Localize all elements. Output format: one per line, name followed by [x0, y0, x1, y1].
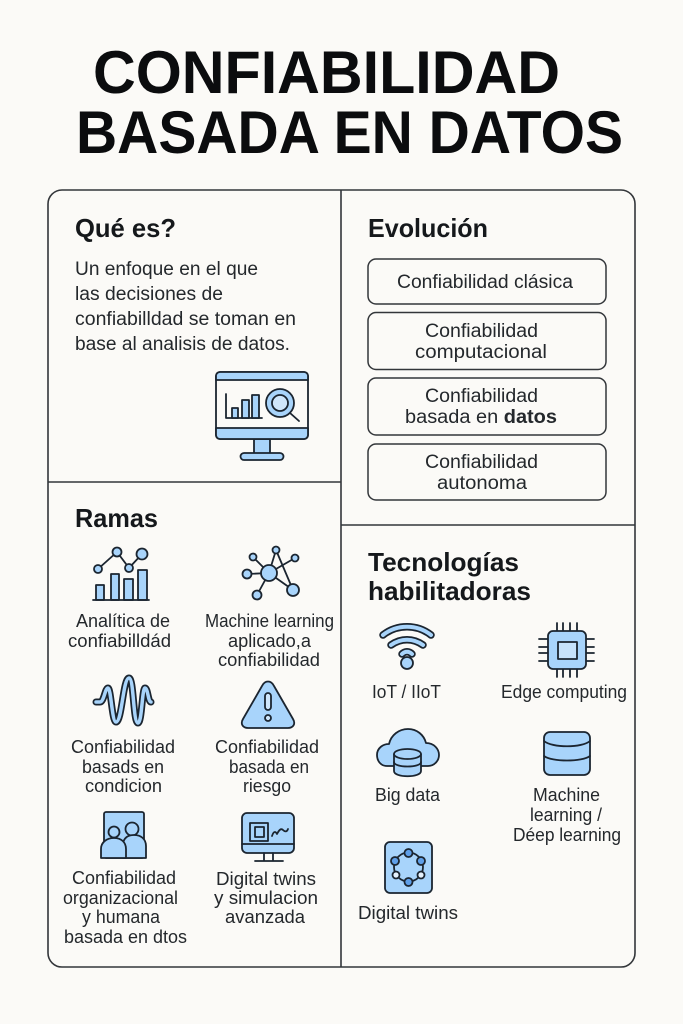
heading: tecnologías habilitadoras — [368, 547, 531, 606]
item: confiabilidad basada en riesgo — [215, 682, 319, 796]
label — [205, 611, 334, 670]
box: confiabilidad autonoma: Confiabilidad — [425, 452, 538, 473]
panel: qué es — [48, 190, 341, 482]
label: basads en — [82, 757, 164, 777]
box: confiabilidad basada en datos: basada en datos — [405, 407, 557, 428]
label — [63, 868, 187, 947]
box: confiabilidad computacional: Confiabilidad — [425, 321, 538, 342]
box: confiabilidad basada en datos — [368, 378, 606, 435]
panel: tecnologías habilitadoras — [341, 525, 635, 967]
main frame — [48, 190, 635, 967]
item: confiabilidad basada en condicion — [71, 678, 175, 796]
box: confiabilidad computacional — [368, 312, 606, 370]
label: y humana — [82, 907, 161, 927]
heading: qué es: Qué es? — [75, 213, 176, 243]
label: avanzada — [225, 907, 306, 927]
icon: warning triangle — [242, 682, 294, 728]
text block: definition: confiabilldad se toman en — [75, 309, 296, 330]
label: Confiabilidad — [72, 868, 176, 888]
item: iot — [372, 627, 441, 702]
label — [71, 737, 175, 796]
label — [513, 785, 621, 845]
text block: definition: las decisiones de — [75, 284, 223, 305]
item: analítica de confiabilidad — [68, 548, 171, 651]
label: learning / — [530, 805, 602, 825]
box: confiabilidad computacional: computacional — [415, 342, 547, 363]
box: confiabilidad basada en datos: Confiabilidad — [425, 386, 538, 407]
box: confiabilidad clásica — [368, 259, 606, 304]
title: BASADA EN DATOS — [76, 99, 623, 166]
icon: waveform — [96, 678, 151, 723]
heading: evolución: Evolución — [368, 213, 488, 243]
label: basada en dtos — [64, 927, 187, 947]
item: edge computing — [501, 623, 627, 702]
text block: definition — [75, 259, 296, 355]
label: confiabilidad — [218, 650, 320, 670]
label: IoT / IIoT — [372, 682, 441, 702]
label: Machine — [533, 785, 600, 805]
item: digital twins y simulación — [214, 813, 318, 927]
item: machine learning / deep learning — [513, 732, 621, 845]
icon: wifi — [383, 627, 431, 669]
label: Déep learning — [513, 825, 621, 845]
box: confiabilidad autonoma: autonoma — [437, 473, 527, 494]
text block: definition: Un enfoque en el que — [75, 259, 258, 280]
heading: tecnologías habilitadoras: habilitadoras — [368, 576, 531, 606]
label: condicion — [85, 776, 162, 796]
item: digital twins — [358, 842, 458, 923]
text block: definition: base al analisis de datos. — [75, 334, 290, 355]
label: Confiabilidad — [71, 737, 175, 757]
label: Analítica de — [76, 611, 170, 631]
item: big data — [375, 729, 441, 805]
icon: monitor with chart and magnifier — [216, 372, 308, 460]
label — [214, 869, 318, 927]
icon: monitor simulation — [242, 813, 294, 861]
label: organizacional — [63, 888, 178, 908]
heading: ramas: Ramas — [75, 503, 158, 533]
label: y simulacion — [214, 888, 318, 908]
label: aplicado,a — [228, 631, 312, 651]
icon: database stack — [544, 732, 590, 775]
icon: cloud with database — [377, 729, 439, 776]
label — [68, 611, 171, 651]
heading: tecnologías habilitadoras: Tecnologías — [368, 547, 519, 577]
panel: ramas — [48, 482, 341, 967]
label — [215, 737, 319, 796]
box: confiabilidad clásica: Confiabilidad clásica — [397, 272, 573, 293]
icon: neural network — [242, 546, 299, 600]
label: basada en — [229, 757, 309, 777]
item: confiabilidad organizacional y humana — [63, 812, 187, 947]
item: machine learning — [205, 546, 334, 670]
label: Machine learning — [205, 611, 334, 631]
label: Edge computing — [501, 682, 627, 702]
icon: node ring — [385, 842, 432, 893]
icon: bars and line chart — [93, 548, 149, 600]
title — [76, 39, 623, 166]
icon: chip — [539, 623, 594, 677]
label: riesgo — [243, 776, 291, 796]
icon: people — [101, 812, 146, 858]
label: Big data — [375, 785, 441, 805]
panel: evolución — [341, 190, 635, 525]
box: confiabilidad autonoma — [368, 444, 606, 500]
label: confiabilldád — [68, 631, 171, 651]
title: CONFIABILIDAD — [93, 39, 560, 106]
label: Digital twins — [216, 869, 316, 889]
label: Digital twins — [358, 903, 458, 923]
label: Confiabilidad — [215, 737, 319, 757]
